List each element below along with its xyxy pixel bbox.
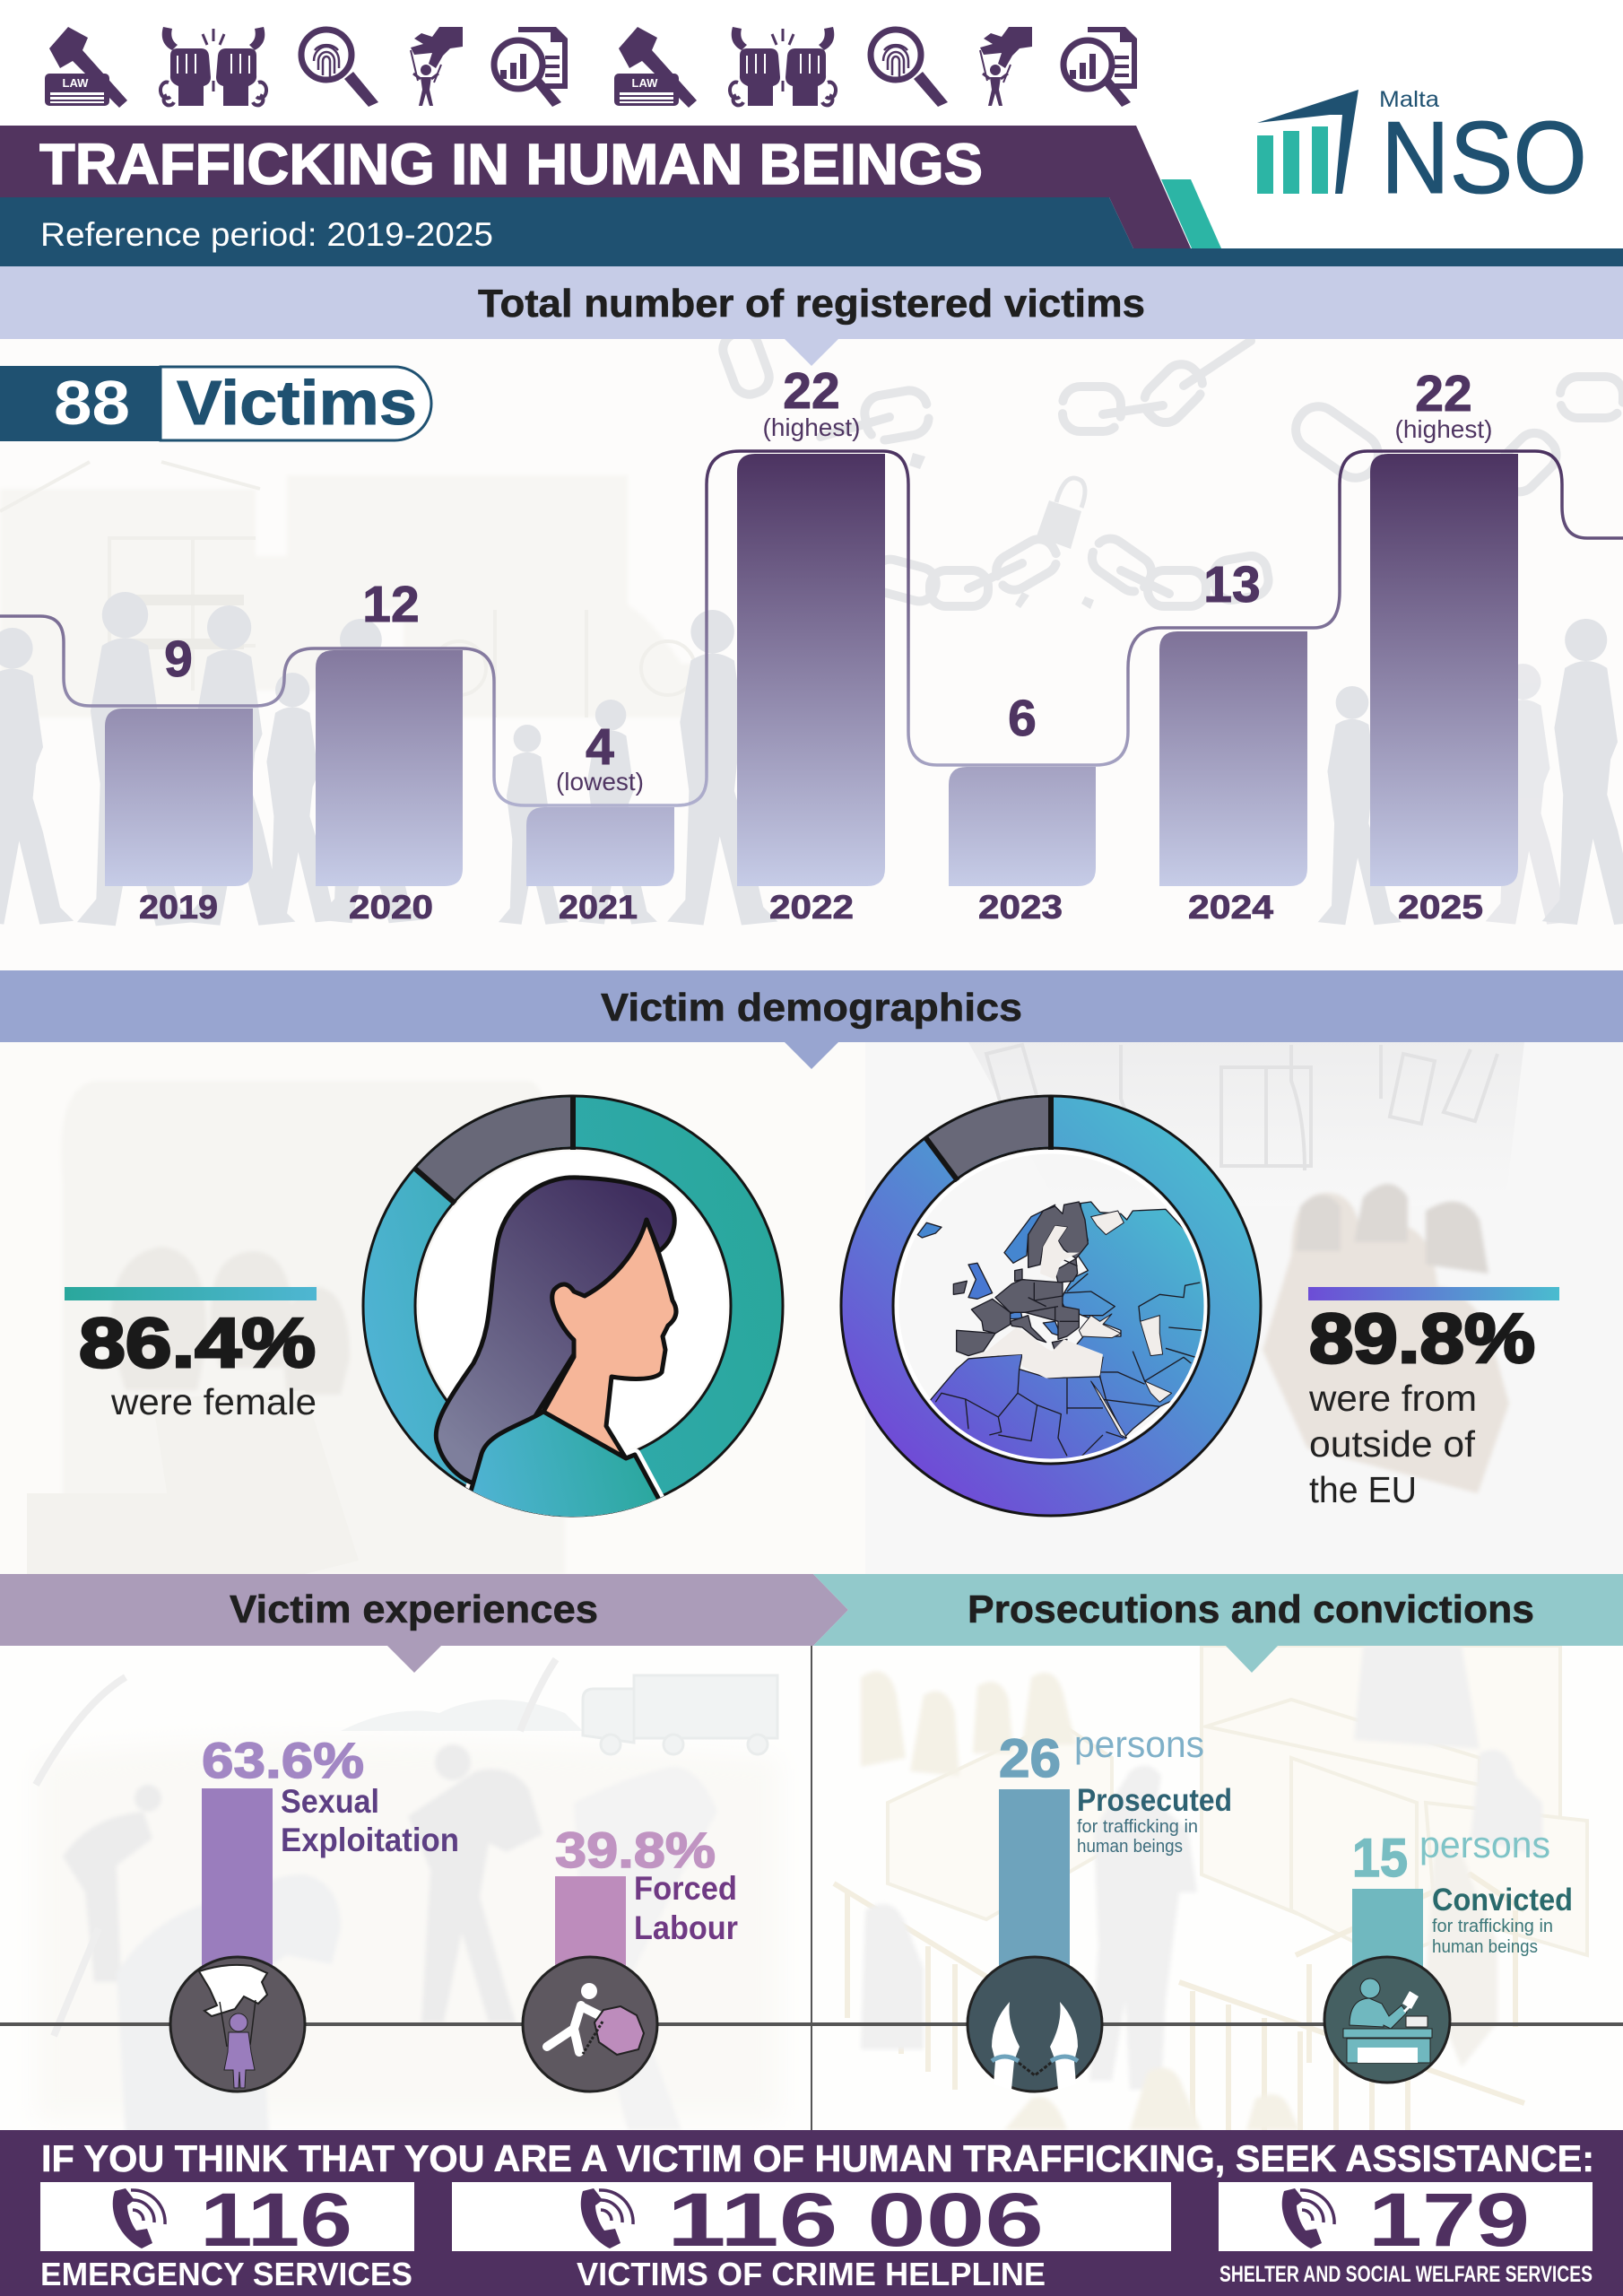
bar 2020 — [316, 650, 463, 886]
NSO logo — [1257, 87, 1587, 215]
stat: percent female: were female — [110, 1381, 317, 1422]
divider lines — [0, 1646, 1623, 2130]
panel: victim experiences — [0, 1574, 848, 2135]
value notes — [556, 413, 1492, 796]
icon: hand controlling puppet — [411, 27, 463, 106]
bar 2022 — [737, 454, 885, 886]
heading band: Victim experiences — [230, 1587, 598, 1631]
value labels — [164, 362, 1472, 776]
chart: forced labour: Labour — [634, 1909, 738, 1946]
helpline: 116: 116 — [200, 2178, 352, 2262]
value notes: (highest) — [1395, 415, 1492, 443]
label: victims of crime helpline: VICTIMS OF CRIME HELPLINE — [577, 2256, 1046, 2292]
background: scene of containers, silhouettes and chains — [0, 327, 1623, 970]
background: van interior with people — [0, 1042, 1623, 1574]
year labels: 2020 — [349, 889, 433, 926]
chart: convicted: for trafficking in — [1432, 1917, 1553, 1936]
bar 2019 — [105, 709, 253, 886]
icon: fists breaking chains (repeat) — [730, 27, 836, 106]
icon: gavel and law book: LAW — [63, 76, 89, 90]
value labels: 9 — [164, 631, 193, 688]
call to action: IF YOU THINK THAT YOU ARE A VICTIM OF HUMAN TRAFFICKING, SEEK ASSISTANCE: — [41, 2137, 1594, 2179]
NSO logo: Malta — [1379, 87, 1439, 112]
map: Europe and neighbours — [917, 1202, 1213, 1468]
helpline: 179: 179 — [1368, 2178, 1530, 2262]
icon: hand controlling puppet (repeat) — [980, 27, 1032, 106]
heading band — [0, 970, 1623, 1069]
stat: percent outside EU: were from — [1308, 1378, 1477, 1419]
icon: woman profile — [436, 1178, 676, 1524]
icon: magnifier with fingerprint (repeat) — [871, 30, 948, 107]
icon: gavel and law book (repeat) — [614, 27, 697, 108]
label: emergency services: EMERGENCY SERVICES — [40, 2256, 412, 2292]
icon: magnifier on report — [494, 27, 568, 107]
stat: percent female — [65, 1287, 317, 1422]
value notes: (highest) — [763, 413, 860, 441]
donut chart: 89.8% outside EU — [867, 1095, 1235, 1490]
value labels: 22 — [783, 362, 840, 420]
helpline: 179 — [1219, 2178, 1593, 2262]
year labels: 2025 — [1398, 889, 1483, 926]
bar 2024 — [1159, 631, 1307, 886]
heading band: Prosecutions and convictions — [968, 1587, 1534, 1631]
chart: forced labour: 39.8% — [555, 1822, 716, 1878]
step outline — [0, 451, 1623, 805]
title: TRAFFICKING IN HUMAN BEINGS — [39, 132, 983, 196]
background: courtroom scene — [812, 1646, 1623, 2130]
chart: convicted: 15 — [1352, 1828, 1408, 1888]
chart: convicted: persons — [1419, 1823, 1550, 1866]
chart: sexual exploitation: Exploitation — [281, 1822, 459, 1858]
bar 2023 — [949, 767, 1096, 886]
heading band: Total number of registered victims — [478, 282, 1145, 326]
stat: percent outside EU: 89.8% — [1309, 1299, 1535, 1378]
chart: forced labour — [523, 1822, 738, 2092]
heading band: Victim demographics — [601, 986, 1022, 1030]
header banner — [0, 126, 1623, 266]
chart: prosecuted: for trafficking in — [1077, 1817, 1198, 1837]
chart: sexual exploitation: 63.6% — [202, 1732, 364, 1788]
icon: magnifier with fingerprint — [301, 30, 378, 107]
value labels: 12 — [362, 576, 420, 633]
chart: convicted: Convicted — [1432, 1883, 1573, 1918]
year labels — [139, 889, 1483, 926]
stat: percent outside EU: the EU — [1309, 1469, 1417, 1510]
footer: helplines — [0, 2130, 1623, 2296]
panel: victim demographics — [0, 970, 1623, 1574]
helpline: 116 006: 116 006 — [667, 2178, 1044, 2262]
stat: percent outside EU: outside of — [1309, 1423, 1476, 1465]
chart: prosecuted: Prosecuted — [1077, 1783, 1232, 1818]
bar 2021 — [526, 807, 674, 886]
year labels: 2021 — [559, 889, 638, 926]
chart: prosecuted: persons — [1074, 1723, 1204, 1765]
heading band — [813, 1574, 1623, 1673]
helpline: 116 006 — [452, 2178, 1171, 2262]
year labels: 2019 — [139, 889, 218, 926]
chart: prosecuted: human beings — [1077, 1837, 1183, 1857]
chart: forced labour: Forced — [634, 1870, 737, 1907]
chart: convicted — [1324, 1823, 1573, 2083]
total victims badge: 88 — [54, 368, 130, 438]
total victims badge — [0, 366, 431, 441]
helpline: 116 — [40, 2178, 414, 2262]
panel: prosecutions and convictions — [812, 1574, 1623, 2130]
heading band — [0, 266, 1623, 366]
icon: figure pushing boulder — [523, 1957, 657, 2092]
value labels: 22 — [1415, 365, 1472, 422]
year labels: 2022 — [769, 889, 854, 926]
bar 2025 — [1370, 454, 1518, 886]
chart: convicted: human beings — [1432, 1937, 1538, 1957]
total victims badge: Victims — [177, 368, 417, 438]
background: labourers in a field — [0, 1646, 812, 2135]
icon: handcuffed hands — [968, 1957, 1102, 2092]
bar chart: victims per year — [0, 362, 1623, 926]
icon: gavel and law book (repeat): LAW — [632, 76, 658, 90]
reference period: Reference period: 2019-2025 — [40, 216, 493, 253]
chart: sexual exploitation — [170, 1732, 459, 2092]
value notes: (lowest) — [556, 768, 644, 796]
chart: sexual exploitation: Sexual — [281, 1783, 379, 1820]
chart: prosecuted: 26 — [999, 1728, 1061, 1788]
value labels: 13 — [1203, 556, 1261, 613]
icon: puppet held by hand — [170, 1957, 305, 2092]
panel: total registered victims — [0, 266, 1623, 970]
value labels: 6 — [1008, 690, 1037, 747]
stat: percent female: 86.4% — [79, 1303, 316, 1382]
icon row: trafficking themed icons — [45, 27, 1137, 108]
icon: gavel and law book — [45, 27, 127, 108]
icon: judge with gavel — [1324, 1957, 1450, 2083]
year labels: 2023 — [978, 889, 1063, 926]
value labels: 4 — [586, 718, 614, 776]
heading band — [0, 1574, 848, 1673]
year labels: 2024 — [1188, 889, 1273, 926]
stat: percent outside EU — [1308, 1287, 1559, 1510]
NSO logo: NSO — [1381, 101, 1587, 215]
icon: fists breaking chains — [161, 27, 266, 106]
icon: magnifier on report (repeat) — [1063, 27, 1137, 107]
donut chart: 86.4% female — [389, 1095, 757, 1524]
chart: prosecuted — [968, 1723, 1232, 2092]
